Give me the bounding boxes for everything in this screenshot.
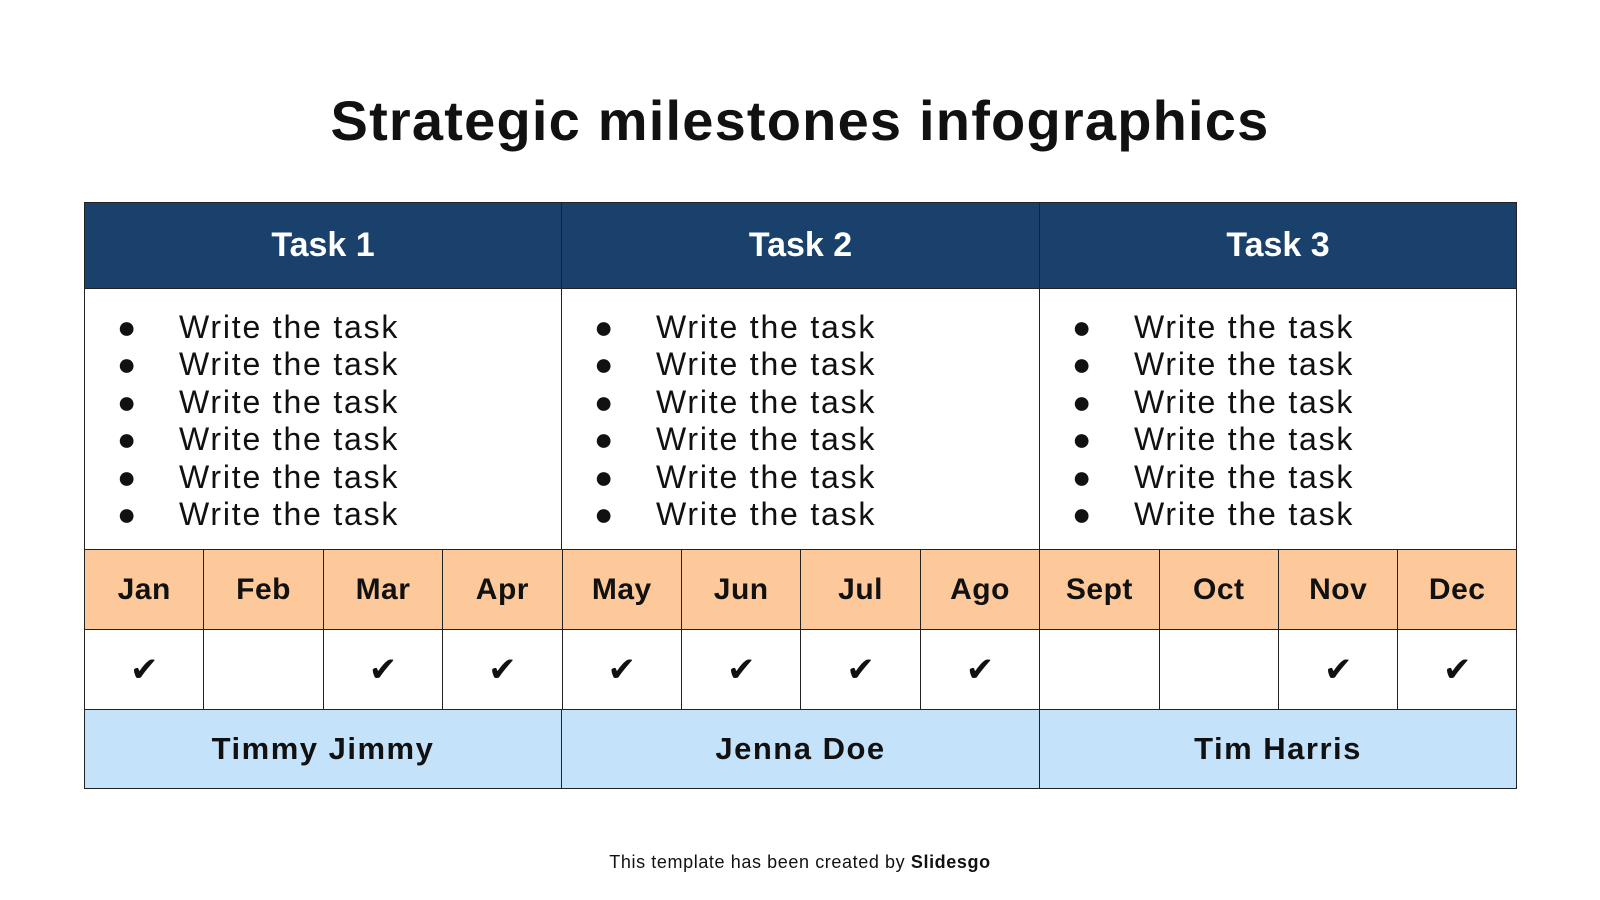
task list 1: Write the task — [179, 421, 399, 457]
checkmarks row: ✔ — [130, 650, 158, 688]
task list 1: Write the task — [179, 459, 399, 495]
task list 3: ● — [1072, 496, 1091, 532]
checkmarks row: ✔ — [369, 650, 397, 688]
task list 2: ● — [594, 309, 613, 345]
task list 1: ● — [117, 459, 136, 495]
checkmarks row: ✔ — [846, 650, 875, 688]
task list 2: Write the task — [656, 384, 876, 420]
months row: Jan — [118, 572, 171, 606]
checkmarks row: ✔ — [1443, 650, 1471, 688]
owner: Timmy Jimmy — [84, 709, 562, 789]
task list 1: Write the task — [179, 496, 399, 532]
task list 2: ● — [594, 384, 613, 420]
task list 3: Write the task — [1134, 346, 1354, 382]
task list 3: Write the task — [1134, 496, 1354, 532]
task list 2: Write the task — [656, 346, 876, 382]
months row: Feb — [236, 572, 291, 606]
task list 3: ● — [1072, 346, 1091, 382]
task list 1: ● — [117, 346, 136, 382]
title: Strategic milestones infographics — [331, 88, 1269, 152]
months row: Sept — [1066, 572, 1133, 606]
task list 1: Write the task — [179, 309, 399, 345]
owner: Timmy Jimmy: Timmy Jimmy — [212, 731, 434, 766]
months row: Jul — [838, 572, 883, 606]
months row: Apr — [476, 572, 529, 606]
months row: May — [592, 572, 652, 606]
checkmarks row: ✔ — [488, 650, 517, 688]
header: Task 1: Task 1 — [271, 226, 375, 264]
checkmarks row — [84, 630, 1517, 709]
table — [84, 202, 1517, 789]
checkmarks row: ✔ — [966, 650, 994, 688]
months row: Jun — [714, 572, 769, 606]
owner: Tim Harris: Tim Harris — [1194, 731, 1362, 766]
task list 2: Write the task — [656, 309, 876, 345]
task list 1: Write the task — [179, 384, 399, 420]
footer credit: Slidesgo — [911, 852, 991, 872]
task list 1: Write the task — [179, 346, 399, 382]
task list 1: ● — [117, 421, 136, 457]
task list 3: ● — [1072, 384, 1091, 420]
task list 1: ● — [117, 309, 136, 345]
task list 3: ● — [1072, 421, 1091, 457]
footer credit: This template has been created by — [609, 852, 905, 872]
task list 3: ● — [1072, 459, 1091, 495]
months row: Nov — [1309, 572, 1367, 606]
task list 3: Write the task — [1134, 309, 1354, 345]
owner: Jenna Doe: Jenna Doe — [715, 731, 886, 766]
task list 2: Write the task — [656, 459, 876, 495]
months row — [84, 550, 1517, 629]
task list 2: ● — [594, 459, 613, 495]
header: Task 2: Task 2 — [749, 226, 852, 264]
months row: Oct — [1193, 572, 1245, 606]
owner: Tim Harris — [1039, 709, 1517, 789]
header: Task 3 — [1039, 202, 1517, 289]
task list 1 — [84, 288, 562, 550]
task list 1: ● — [117, 496, 136, 532]
task list 3 — [1039, 288, 1517, 550]
task list 2: Write the task — [656, 421, 876, 457]
checkmarks row: ✔ — [727, 650, 755, 688]
months row: Mar — [356, 572, 410, 606]
header: Task 1 — [84, 202, 562, 289]
task list 3: Write the task — [1134, 459, 1354, 495]
months row: Ago — [950, 572, 1010, 606]
task list 3: Write the task — [1134, 421, 1354, 457]
checkmarks row: ✔ — [608, 650, 636, 688]
task list 2 — [561, 288, 1040, 550]
task list 2: ● — [594, 496, 613, 532]
task list 3: ● — [1072, 309, 1091, 345]
months row: Dec — [1429, 572, 1485, 606]
header: Task 2 — [561, 202, 1040, 289]
task list 3: Write the task — [1134, 384, 1354, 420]
task list 2: ● — [594, 346, 613, 382]
checkmarks row: ✔ — [1324, 650, 1352, 688]
owner: Jenna Doe — [561, 709, 1040, 789]
header: Task 3: Task 3 — [1226, 226, 1330, 264]
task list 2: ● — [594, 421, 613, 457]
task list 1: ● — [117, 384, 136, 420]
task list 2: Write the task — [656, 496, 876, 532]
